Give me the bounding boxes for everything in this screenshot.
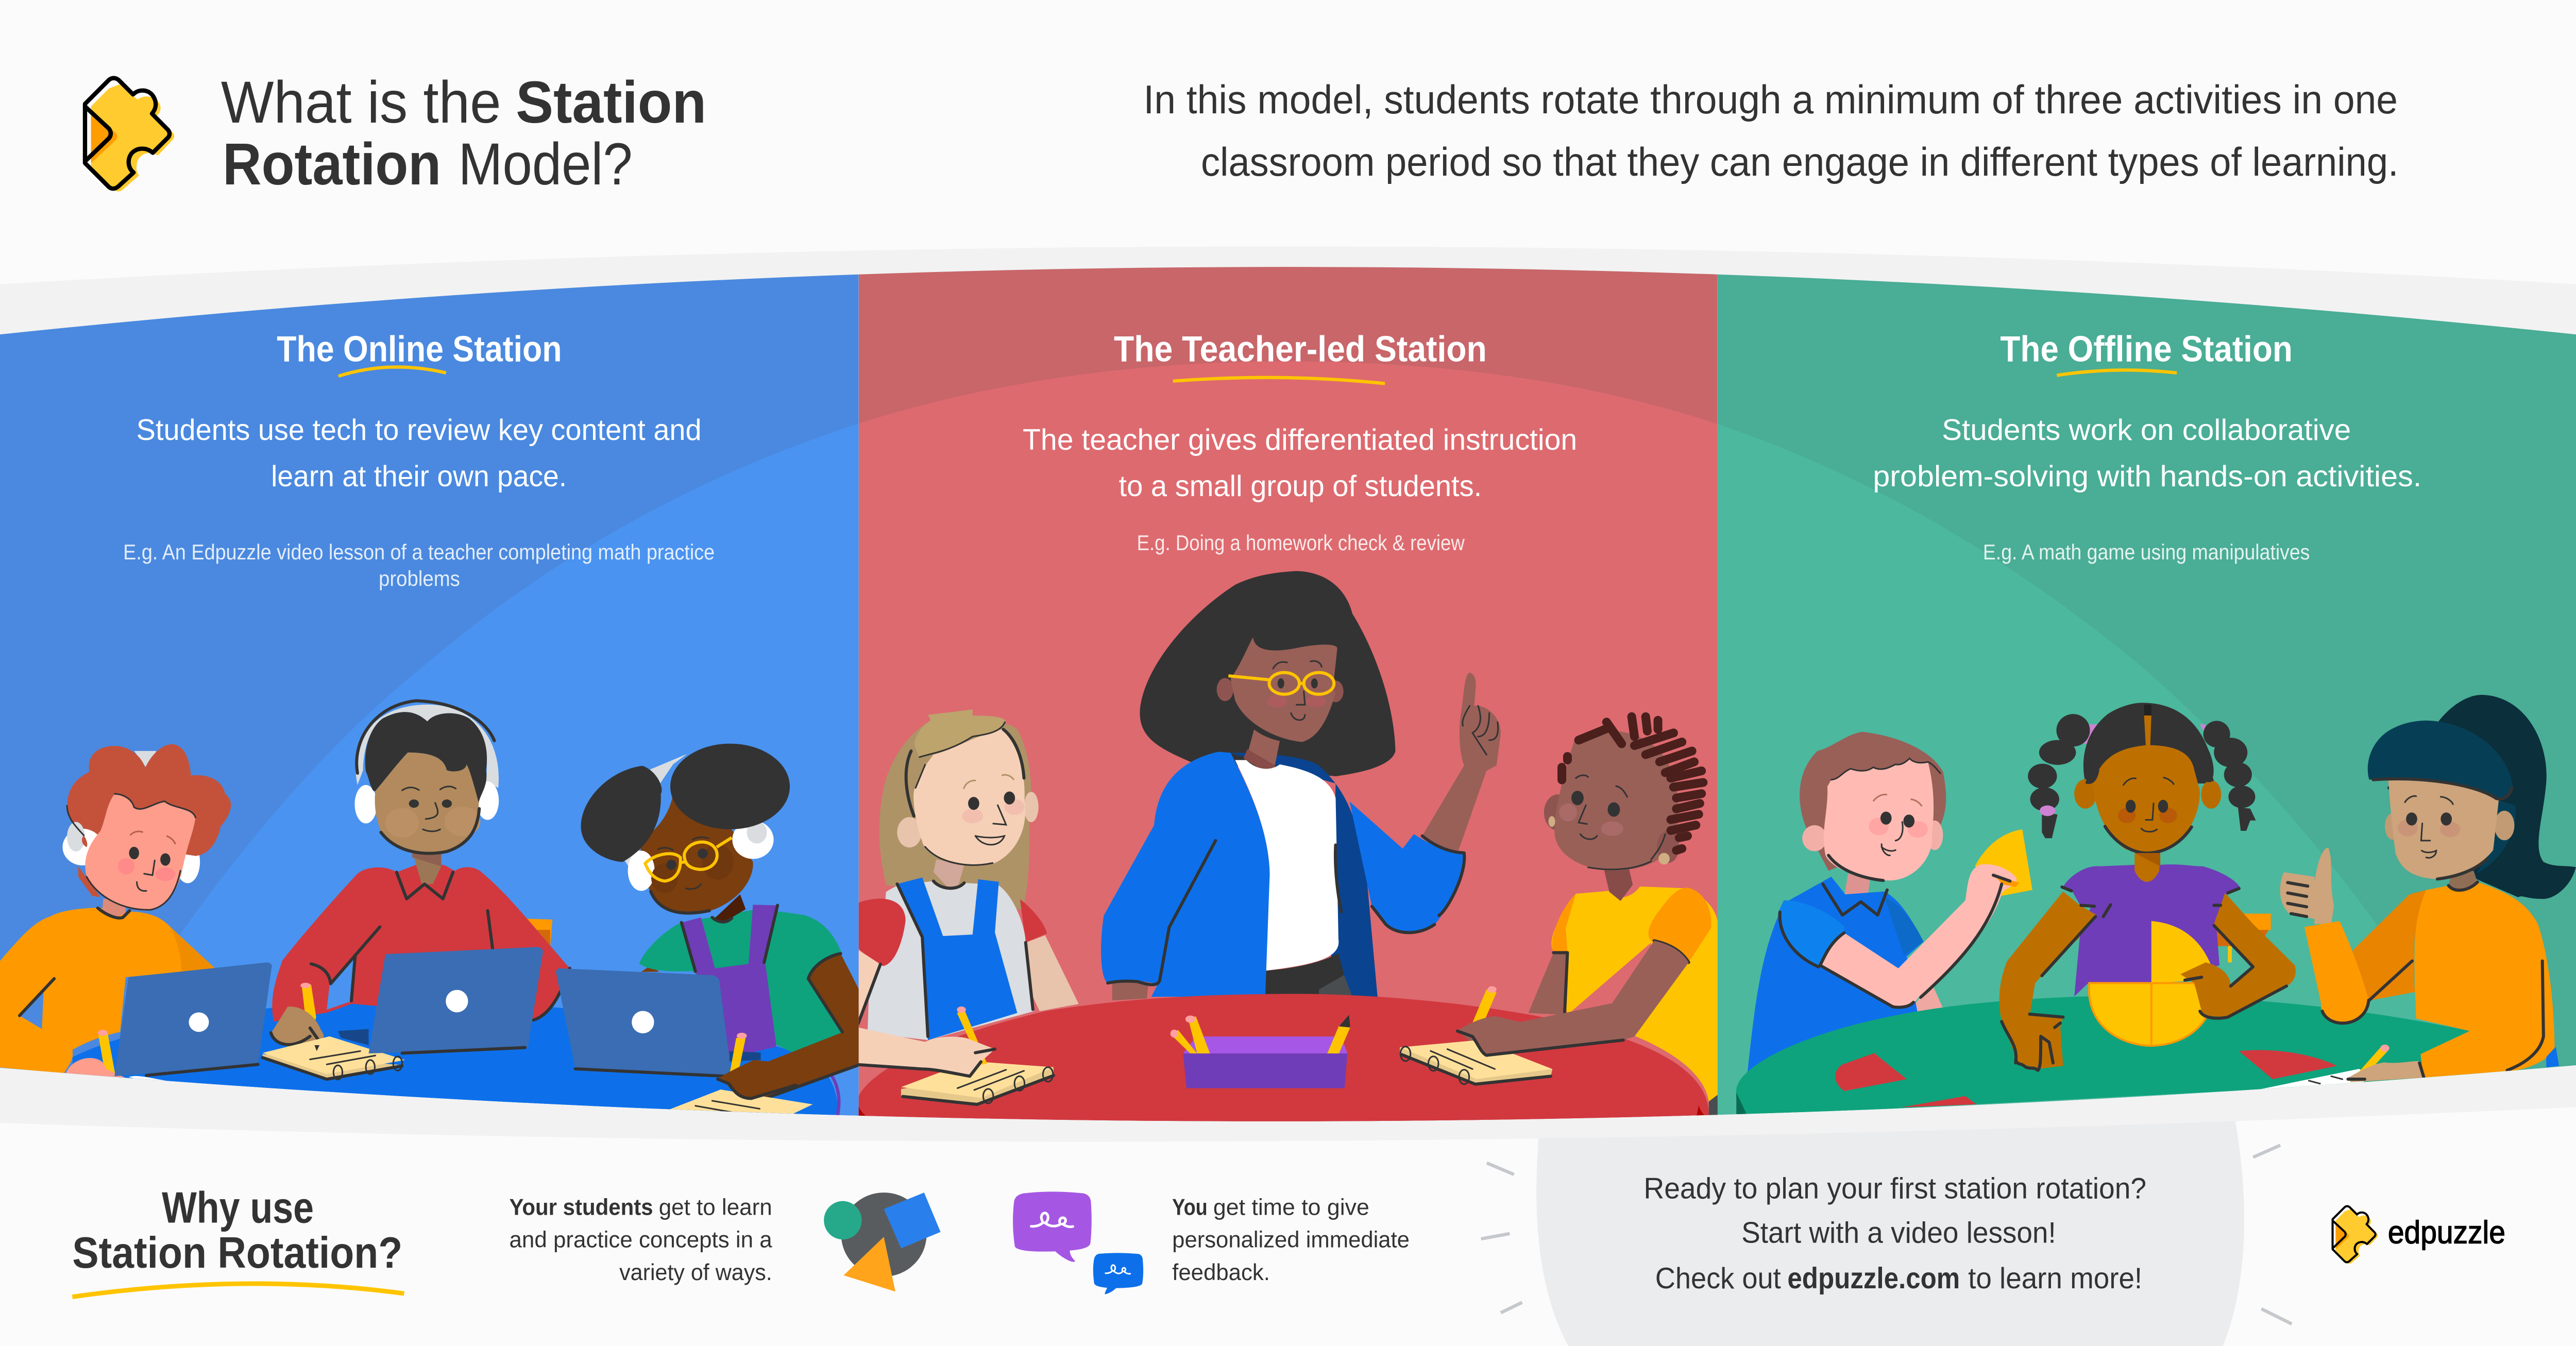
text: your students bbox=[510, 1195, 772, 1285]
text: you get time bbox=[1172, 1195, 1410, 1285]
text: you get time: You bbox=[1172, 1195, 1208, 1220]
icon: geometric shapes bbox=[824, 1192, 941, 1291]
underline: offline bbox=[2057, 370, 2177, 376]
intro text: classroom period so that they can engage in different types of learning. bbox=[1201, 140, 2399, 184]
laptop 2 bbox=[369, 947, 543, 1053]
pencil box bbox=[1171, 1015, 1350, 1088]
heading: why use station rotation bbox=[72, 1183, 402, 1277]
panel: online station bbox=[0, 274, 859, 1116]
text: you get time: feedback. bbox=[1172, 1260, 1270, 1285]
example: online: E.g. An Edpuzzle video lesson of a teacher completing math practice bbox=[123, 540, 715, 564]
panel: offline station bbox=[1718, 164, 2576, 1216]
underline: why use bbox=[72, 1284, 404, 1297]
illustration: three students with laptops bbox=[0, 701, 860, 1134]
call to action text: to learn more! bbox=[1968, 1262, 2142, 1295]
table bbox=[855, 994, 1709, 1134]
laptop 3 bbox=[556, 968, 761, 1076]
decorative ticks around call to action bbox=[1481, 1145, 2292, 1324]
underline: teacher-led bbox=[1173, 378, 1385, 384]
student 2 bbox=[271, 701, 570, 1047]
title: Station bbox=[516, 70, 706, 135]
notebook right bbox=[1400, 1016, 1623, 1085]
student 3 bbox=[581, 744, 860, 1099]
text: you get time: get time to give bbox=[1213, 1195, 1369, 1220]
text: your students: and practice concepts in a bbox=[510, 1228, 772, 1253]
call to action text: Check out bbox=[1655, 1262, 1781, 1295]
call to action text: Ready to plan your first station rotation? bbox=[1643, 1172, 2146, 1205]
text: your students: Your students bbox=[510, 1195, 653, 1220]
call to action text: edpuzzle.com bbox=[1787, 1262, 1960, 1295]
text: your students: get to learn bbox=[659, 1195, 772, 1220]
description: online: Students use tech to review key content and bbox=[137, 414, 702, 447]
description: teacher-led: to a small group of students. bbox=[1119, 470, 1482, 503]
student girl bbox=[1736, 703, 2470, 1116]
icon: chat bubbles bbox=[1013, 1191, 1143, 1294]
title: What is the bbox=[221, 70, 501, 135]
intro text: In this model, students rotate through a minimum of three activities in one bbox=[1143, 78, 2398, 122]
call to action text: Start with a video lesson! bbox=[1741, 1217, 2056, 1250]
call to action text bbox=[1643, 1172, 2146, 1295]
heading: why use station rotation: Station Rotation? bbox=[72, 1229, 402, 1277]
table bbox=[72, 1003, 839, 1115]
illustration: three students with manipulatives bbox=[1736, 695, 2576, 1116]
student 3 pencil and hand bbox=[718, 1033, 799, 1098]
underline: online bbox=[338, 367, 446, 376]
student 1 pencil and hand bbox=[66, 1030, 167, 1081]
description: offline: Students work on collaborative bbox=[1942, 414, 2351, 447]
logo: edpuzzle puzzle piece bbox=[85, 78, 174, 192]
illustration: teacher and two students bbox=[855, 571, 1718, 1134]
student woman bbox=[2259, 695, 2576, 1089]
student 1 body bbox=[0, 899, 215, 1074]
grey band behind stations bbox=[0, 246, 2576, 1141]
notebook 2 bbox=[668, 1089, 812, 1119]
logo: edpuzzle small bbox=[2333, 1206, 2505, 1264]
description: offline bbox=[1873, 414, 2421, 493]
student left arm and pencil bbox=[858, 1007, 995, 1076]
heading: the offline station: The Offline Station bbox=[2000, 329, 2293, 369]
heading: the online station: The Online Station bbox=[277, 329, 562, 369]
laptop 1 bbox=[114, 962, 272, 1076]
description: online: learn at their own pace. bbox=[271, 460, 567, 493]
description: offline: problem-solving with hands-on activities. bbox=[1873, 460, 2421, 493]
heading: why use station rotation: Why use bbox=[162, 1183, 314, 1232]
panel: teacher-led station bbox=[855, 164, 1718, 1216]
title: Model? bbox=[459, 131, 633, 197]
example: online bbox=[123, 540, 715, 590]
title bbox=[221, 70, 706, 197]
student 1 head bbox=[62, 744, 231, 911]
student left bbox=[858, 709, 1079, 1040]
title: Rotation bbox=[223, 131, 441, 197]
example: online: problems bbox=[379, 566, 460, 590]
notebook left bbox=[901, 1061, 1054, 1105]
student right bbox=[1457, 717, 1718, 1119]
teacher bbox=[1101, 571, 1501, 1000]
student boy bbox=[1748, 732, 2032, 1072]
intro text bbox=[1143, 78, 2399, 184]
text: your students: variety of ways. bbox=[619, 1260, 772, 1285]
description: teacher-led bbox=[1023, 423, 1577, 503]
notebook 1 bbox=[263, 1029, 405, 1080]
logo: edpuzzle small: edpuzzle bbox=[2388, 1215, 2505, 1250]
heading: the teacher-led station: The Teacher-led Station bbox=[1114, 329, 1487, 369]
call to action panel background bbox=[1536, 1084, 2244, 1346]
text: you get time: personalized immediate bbox=[1172, 1228, 1410, 1253]
example: teacher-led: E.g. Doing a homework check & review bbox=[1137, 531, 1465, 555]
example: offline: E.g. A math game using manipulatives bbox=[1983, 540, 2310, 564]
description: teacher-led: The teacher gives differentiated instruction bbox=[1023, 423, 1577, 456]
description: online bbox=[137, 414, 702, 493]
